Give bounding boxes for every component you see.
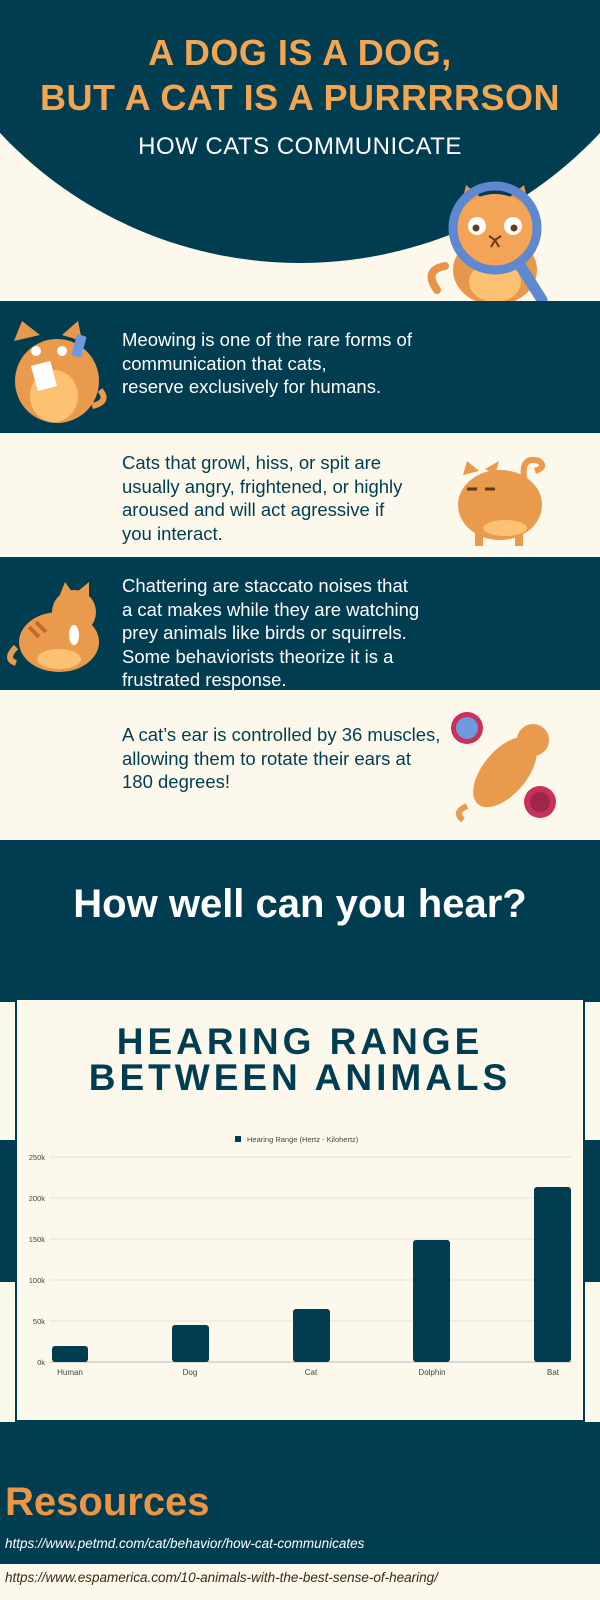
icon: grumpy cat — [458, 456, 546, 546]
text: chattering: Chattering are staccato noises that — [122, 575, 408, 596]
panel: chart card — [15, 1000, 585, 1422]
heading: resources: Resources — [5, 1480, 210, 1524]
text: url 2: https://www.espamerica.com/10-animals-with-the-best-sense-of-hearing/ — [5, 1570, 438, 1585]
bar chart: Dolphin — [418, 1368, 446, 1377]
panel: ear — [122, 712, 556, 822]
title — [40, 32, 560, 118]
bar chart: 150k — [29, 1235, 45, 1244]
icon: cat with phone — [14, 321, 107, 423]
panel: meowing — [0, 301, 600, 433]
side band — [0, 1140, 600, 1282]
text: growl: aroused and will act agressive if — [122, 499, 384, 520]
text: chattering: frustrated response. — [122, 669, 287, 690]
bar chart — [29, 1135, 572, 1377]
text: chattering: a cat makes while they are watching — [122, 598, 419, 620]
text: chattering: prey animals like birds or squirrels. — [122, 622, 407, 643]
title: BUT A CAT IS A PURRRRSON — [40, 77, 560, 118]
legend: Hearing Range (Hertz - Kilohertz) — [247, 1135, 359, 1144]
text: chattering: Some behaviorists theorize it is a — [122, 646, 393, 666]
bar chart: Bat — [547, 1368, 560, 1377]
text: ear — [122, 724, 440, 792]
text: ear: A cat’s ear is controlled by 36 muscles, — [122, 724, 440, 745]
subtitle: HOW CATS COMMUNICATE — [138, 133, 462, 160]
text: growl: you interact. — [122, 522, 223, 544]
icon: cat with bowls — [451, 712, 556, 822]
bar chart: Dog — [183, 1368, 197, 1377]
header circle — [0, 0, 600, 263]
panel: growl — [122, 452, 546, 546]
icon: cat with mouse — [7, 582, 99, 672]
chart title: BETWEEN ANIMALS — [89, 1057, 511, 1098]
text: growl — [122, 452, 402, 544]
bar chart: 100k — [29, 1276, 45, 1285]
text: url 1: https://www.petmd.com/cat/behavior/how-cat-communicates — [5, 1536, 364, 1551]
bar chart: 50k — [33, 1317, 45, 1326]
text: ear: allowing them to rotate their ears at — [122, 748, 411, 768]
bar chart: Human — [57, 1368, 83, 1377]
icon: cat with magnifier — [428, 182, 548, 301]
bar chart: Cat — [305, 1368, 318, 1377]
text: growl: usually angry, frightened, or highly — [122, 476, 402, 496]
bar chart: 250k — [29, 1153, 45, 1162]
heading: how well can you hear: How well can you hear? — [73, 882, 527, 926]
text: chattering — [122, 575, 419, 690]
text: ear: 180 degrees! — [122, 771, 230, 792]
panel: resources — [0, 1422, 600, 1564]
text: meowing — [122, 329, 412, 397]
chart title: HEARING RANGE — [117, 1021, 483, 1062]
text: meowing: communication that cats, — [122, 352, 327, 374]
bar chart: 0k — [37, 1358, 45, 1367]
text: growl: Cats that growl, hiss, or spit are — [122, 452, 381, 473]
chart title — [89, 1021, 511, 1098]
text: meowing: Meowing is one of the rare forms of — [122, 329, 412, 350]
panel: hearing heading band — [0, 840, 600, 1002]
panel: chattering — [0, 557, 600, 690]
title: A DOG IS A DOG, — [148, 32, 452, 73]
bar chart: 200k — [29, 1194, 45, 1203]
text: meowing: reserve exclusively for humans. — [122, 376, 381, 397]
